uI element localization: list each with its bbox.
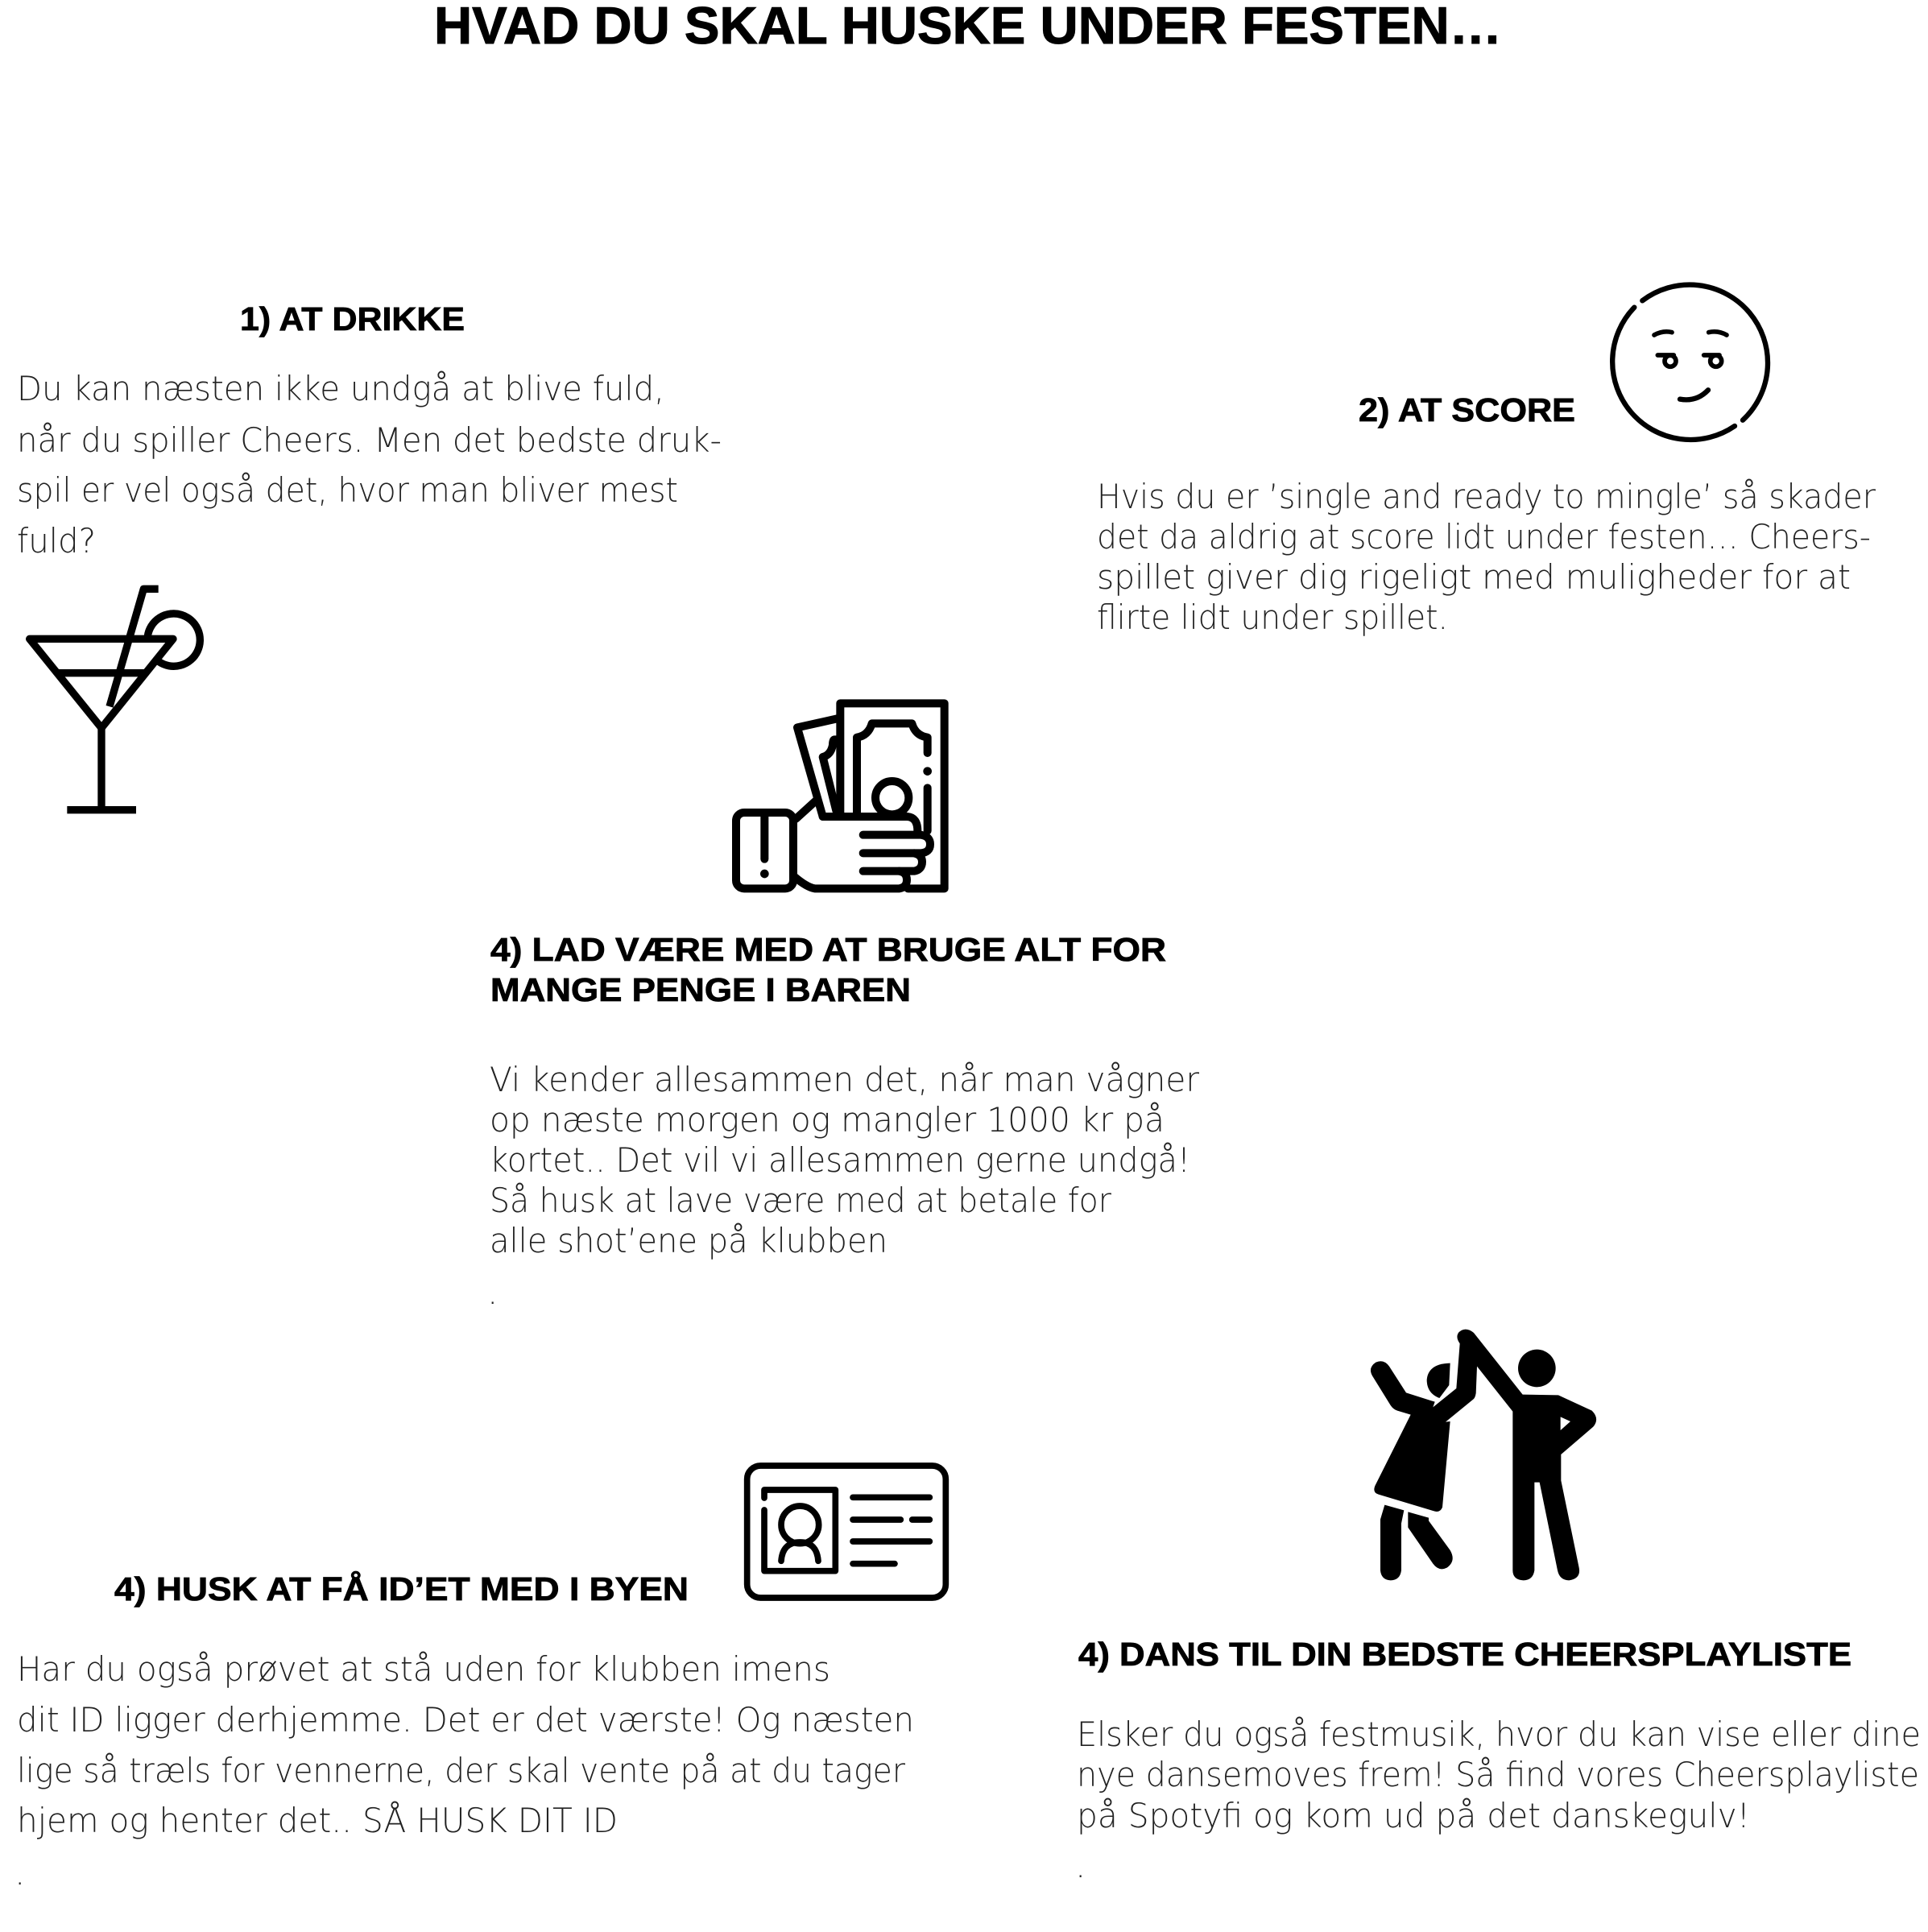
text block: id: dit ID ligger derhjemme. Det er det værste! Og næsten: [17, 1700, 914, 1740]
icon: id card: [747, 1466, 945, 1598]
heading: at score: 2) AT SCORE: [1359, 391, 1575, 428]
text block: dans: [1075, 1715, 1921, 1885]
text block: at drikke: Du kan næsten ikke undgå at blive fuld,: [17, 369, 664, 408]
text block: at drikke: når du spiller Cheers. Men det bedste druk-: [17, 420, 722, 460]
text block: at score: flirte lidt under spillet.: [1097, 598, 1448, 637]
panel: id: [14, 1466, 945, 1893]
panel: dans: [1075, 1330, 1921, 1885]
text block: at score: det da aldrig at score lidt under festen… Cheers-: [1097, 517, 1871, 556]
icon: dancing couple high five: [1371, 1330, 1596, 1580]
panel: penge i baren: [487, 703, 1200, 1312]
text block: id: hjem og henter det.. SÅ HUSK DIT ID: [17, 1801, 618, 1840]
panel: at drikke: [17, 300, 722, 810]
text block: at drikke: [17, 369, 722, 561]
heading: penge i baren: 4) LAD VÆRE MED AT BRUGE ALT FOR: [490, 931, 1166, 968]
heading: penge i baren: MANGE PENGE I BAREN: [490, 971, 911, 1008]
text block: at drikke: spil er vel også det, hvor man bliver mest: [17, 470, 678, 510]
text block: at score: spillet giver dig rigeligt med muligheder for at: [1097, 557, 1851, 597]
text block: id: [14, 1649, 914, 1893]
icon: smirking face: [1612, 285, 1768, 440]
heading: penge i baren: [490, 931, 1166, 1008]
text block: id: .: [14, 1853, 25, 1893]
heading: id: 4) HUSK AT FÅ ID’ET MED I BYEN: [114, 1570, 689, 1607]
text block: penge i baren: alle shot’ene på klubben: [490, 1221, 887, 1260]
text block: penge i baren: op næste morgen og mangler 1000 kr på: [490, 1100, 1165, 1140]
text block: dans: på Spotyfi og kom ud på det danskegulv!: [1077, 1796, 1750, 1835]
text block: id: lige så træls for vennerne, der skal vente på at du tager: [17, 1751, 906, 1790]
icon: hand holding money: [736, 703, 945, 888]
text block: at drikke: fuld?: [17, 521, 96, 561]
text block: penge i baren: Så husk at lave være med at betale for: [490, 1181, 1112, 1220]
text block: at score: Hvis du er ’single and ready to mingle’ så skader: [1097, 477, 1876, 516]
text block: penge i baren: Vi kender allesammen det, når man vågner: [490, 1060, 1200, 1099]
icon: cocktail glass: [30, 589, 200, 810]
text block: penge i baren: .: [487, 1272, 498, 1312]
text block: dans: .: [1075, 1846, 1086, 1885]
text block: penge i baren: [487, 1060, 1200, 1312]
text block: penge i baren: kortet.. Det vil vi allesammen gerne undgå!: [490, 1140, 1190, 1180]
heading: at drikke: 1) AT DRIKKE: [240, 300, 465, 337]
heading: dans: 4) DANS TIL DIN BEDSTE CHEERSPLAYLISTE: [1078, 1636, 1851, 1673]
text block: id: Har du også prøvet at stå uden for klubben imens: [17, 1649, 830, 1689]
text block: at score: [1097, 477, 1876, 637]
panel: at score: [1097, 285, 1876, 637]
